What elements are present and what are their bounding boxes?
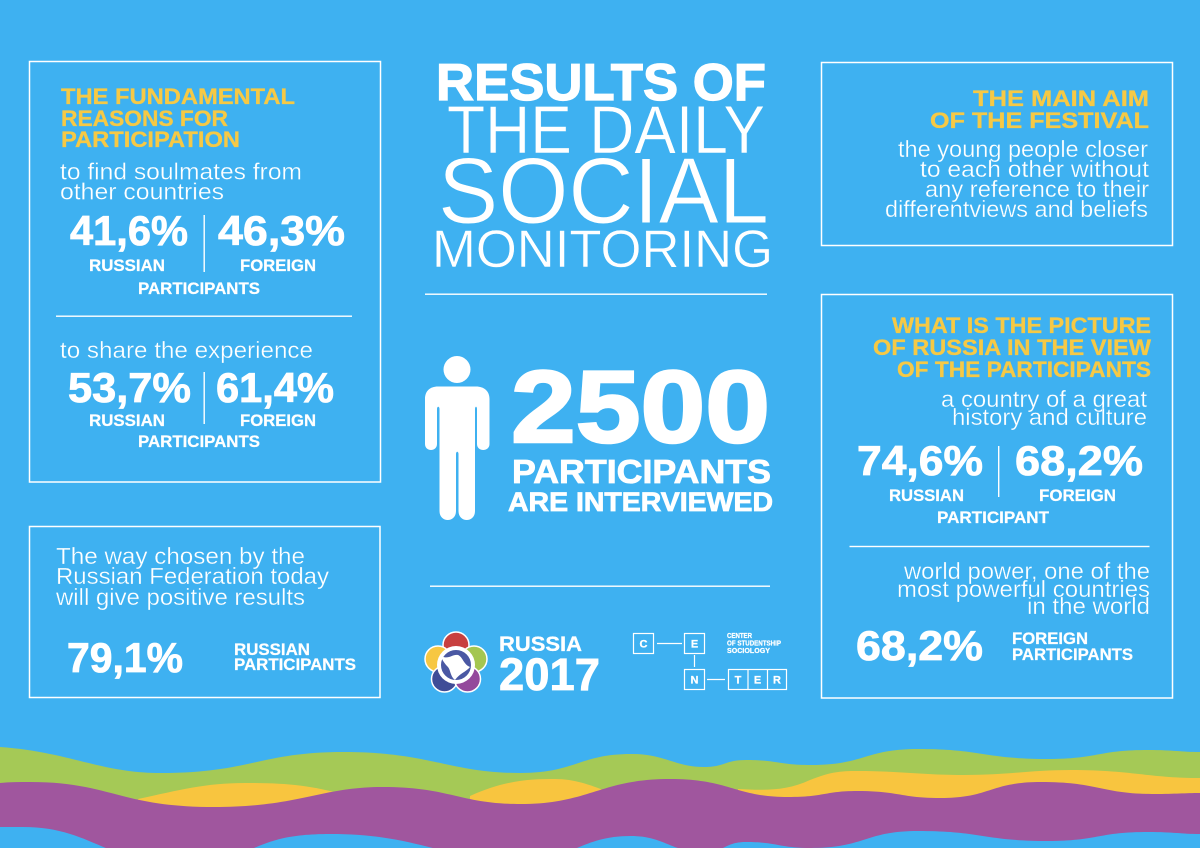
text: aim description: the young people closer xyxy=(898,136,1148,162)
text: world power: most powerful countries xyxy=(897,576,1150,602)
label: foreign participants: FOREIGN xyxy=(1012,630,1088,648)
logo: center of studentship sociology: N xyxy=(691,674,699,686)
stats: share percentages: 61,4% xyxy=(216,364,334,411)
text: to share the experience: to share the experience xyxy=(60,337,313,363)
logo: center of studentship sociology: SOCIOLOGY xyxy=(727,646,770,655)
stats: soulmates percentages xyxy=(70,207,345,298)
title: RESULTS OF xyxy=(436,54,766,112)
logo: center of studentship sociology: C xyxy=(640,638,648,650)
logo: center of studentship sociology: OF STUDENTSHIP xyxy=(727,638,781,648)
heading: picture of Russia: OF THE PARTICIPANTS xyxy=(897,357,1151,382)
text: to find soulmates: to find soulmates from xyxy=(60,158,302,184)
stats: share percentages: RUSSIAN xyxy=(89,412,165,430)
heading: main aim: THE MAIN AIM xyxy=(973,86,1149,111)
panel: way chosen by the Russian Federation xyxy=(30,526,380,698)
panel: main aim of the festival xyxy=(822,62,1172,246)
text: aim description: any reference to their xyxy=(925,176,1149,202)
text: great history and culture: history and culture xyxy=(952,404,1147,430)
title: MONITORING xyxy=(432,220,773,279)
logo: center of studentship sociology: R xyxy=(773,674,781,686)
text: world power xyxy=(897,558,1150,619)
stat: 68,2%: 68,2% xyxy=(856,622,983,669)
text: way chosen: will give positive results xyxy=(55,584,305,610)
stats: share percentages: 53,7% xyxy=(68,364,191,411)
title xyxy=(432,54,773,279)
title: THE DAILY xyxy=(447,92,765,168)
logo: festival flower xyxy=(425,632,487,692)
text: great history and culture: a country of a great xyxy=(941,386,1148,412)
text: way chosen xyxy=(55,543,330,610)
text: aim description: to each other without xyxy=(920,156,1150,182)
title: SOCIAL xyxy=(438,138,769,243)
stats: soulmates percentages: 46,3% xyxy=(218,207,345,254)
text: world power: world power, one of the xyxy=(903,558,1150,584)
stats: soulmates percentages: RUSSIAN xyxy=(89,257,165,275)
stats: share percentages: PARTICIPANTS xyxy=(138,433,260,451)
text: to find soulmates xyxy=(60,158,302,204)
stats: soulmates percentages: 41,6% xyxy=(70,207,188,254)
logo: center of studentship sociology xyxy=(634,631,786,690)
text: great history and culture xyxy=(941,386,1148,430)
heading: fundamental reasons: REASONS FOR xyxy=(61,106,228,131)
stats: history percentages: FOREIGN xyxy=(1039,487,1116,505)
text: aim description xyxy=(885,136,1150,222)
stats: history percentages: RUSSIAN xyxy=(889,487,964,505)
text: world power: in the world xyxy=(1027,593,1150,619)
heading: main aim: OF THE FESTIVAL xyxy=(930,108,1149,133)
logo: center of studentship sociology: CENTER xyxy=(727,631,752,640)
text: aim description: differentviews and beliefs xyxy=(885,196,1148,222)
heading: main aim xyxy=(930,86,1149,133)
heading: fundamental reasons xyxy=(61,84,295,152)
panel: picture of Russia xyxy=(822,294,1172,698)
label: Russian participants: RUSSIAN xyxy=(234,641,310,659)
text: to find soulmates: other countries xyxy=(60,178,224,204)
heading: picture of Russia: WHAT IS THE PICTURE xyxy=(892,313,1151,338)
stat: 2500 participants: PARTICIPANTS xyxy=(512,453,771,490)
heading: picture of Russia xyxy=(873,313,1151,382)
text: Russia 2017: 2017 xyxy=(499,649,600,700)
text: Russia 2017: RUSSIA xyxy=(499,633,582,656)
logo: center of studentship sociology: E xyxy=(754,674,761,686)
stat: 2500 participants: ARE INTERVIEWED xyxy=(508,487,773,517)
stats: history percentages: PARTICIPANT xyxy=(937,509,1049,527)
label: Russian participants xyxy=(234,641,356,674)
panel: fundamental reasons for participation xyxy=(30,62,380,482)
stat: 2500 participants: 2500 xyxy=(511,350,770,464)
text: way chosen: Russian Federation today xyxy=(56,563,330,589)
stats: history percentages: 68,2% xyxy=(1015,437,1143,484)
heading: picture of Russia: OF RUSSIA IN THE VIEW xyxy=(873,335,1151,360)
icon: person xyxy=(425,356,490,520)
stats: history percentages: 74,6% xyxy=(857,437,983,484)
decorative waves xyxy=(0,747,1200,848)
stats: share percentages: FOREIGN xyxy=(240,412,316,430)
label: foreign participants: PARTICIPANTS xyxy=(1012,646,1133,664)
stats: share percentages xyxy=(68,364,334,451)
logo: center of studentship sociology: T xyxy=(735,674,742,686)
logo: center of studentship sociology: E xyxy=(691,638,698,650)
label: Russian participants: PARTICIPANTS xyxy=(234,656,356,674)
text: way chosen: The way chosen by the xyxy=(56,543,305,569)
heading: fundamental reasons: PARTICIPATION xyxy=(61,127,240,152)
stats: history percentages xyxy=(857,437,1143,527)
stats: soulmates percentages: PARTICIPANTS xyxy=(138,280,260,298)
label: foreign participants xyxy=(1012,630,1133,664)
stat: 2500 participants xyxy=(508,350,773,517)
stats: soulmates percentages: FOREIGN xyxy=(240,257,316,275)
stat: 79,1%: 79,1% xyxy=(67,634,183,681)
heading: fundamental reasons: THE FUNDAMENTAL xyxy=(61,84,295,109)
